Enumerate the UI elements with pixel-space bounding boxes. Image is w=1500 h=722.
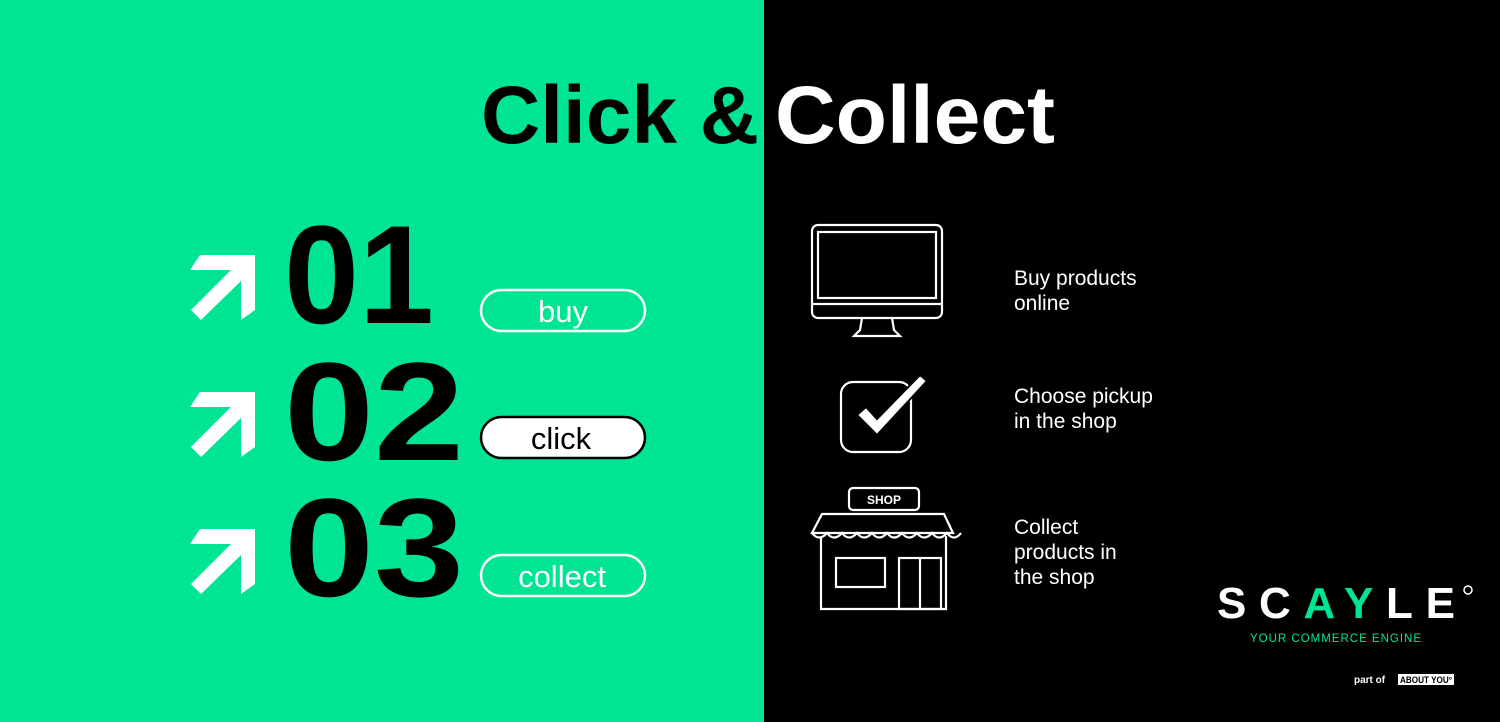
footer: part of ABOUT YOU [1354,674,1454,686]
title [481,70,1055,161]
title: Click & [481,70,759,161]
step 02 [190,333,645,490]
text: choose pickup: Choose pickup [1014,385,1153,408]
text: collect products: the shop [1014,566,1095,589]
text: collect products: products in [1014,541,1117,564]
step 02: 02 [284,333,464,490]
icon: shop: SHOP [867,493,901,507]
panel: green left half [0,0,764,722]
footer: part of ABOUT YOU: ABOUT YOU° [1400,675,1452,685]
step 01 [190,196,645,353]
icon: arrow 3 [190,529,255,594]
pill: buy: buy [538,294,588,329]
step 03 [190,469,645,626]
pill: collect: collect [518,559,606,594]
text: buy products online: Buy products [1014,267,1137,290]
step 01: 01 [284,196,434,353]
logo: SCAYLE [1217,579,1472,645]
logo: SCAYLE: YOUR COMMERCE ENGINE [1250,633,1421,645]
step 03: 03 [284,469,464,626]
logo: SCAYLE: SC AY LE [1217,579,1455,628]
pill: collect [481,555,645,596]
pill: buy [481,290,645,331]
pill: click [481,417,645,458]
icon: shop [812,488,961,609]
text: buy products online: online [1014,292,1070,315]
text: collect products: Collect [1014,516,1078,539]
icon: monitor [812,225,942,336]
icon: checkbox [841,375,927,452]
footer: part of ABOUT YOU: part of [1354,675,1386,686]
pill: click: click [531,421,592,456]
title: Collect [775,70,1055,161]
icon: arrow 2 [190,392,255,457]
text: choose pickup: in the shop [1014,410,1117,433]
icon: arrow 1 [190,255,255,320]
panel: black right half [764,0,1500,722]
